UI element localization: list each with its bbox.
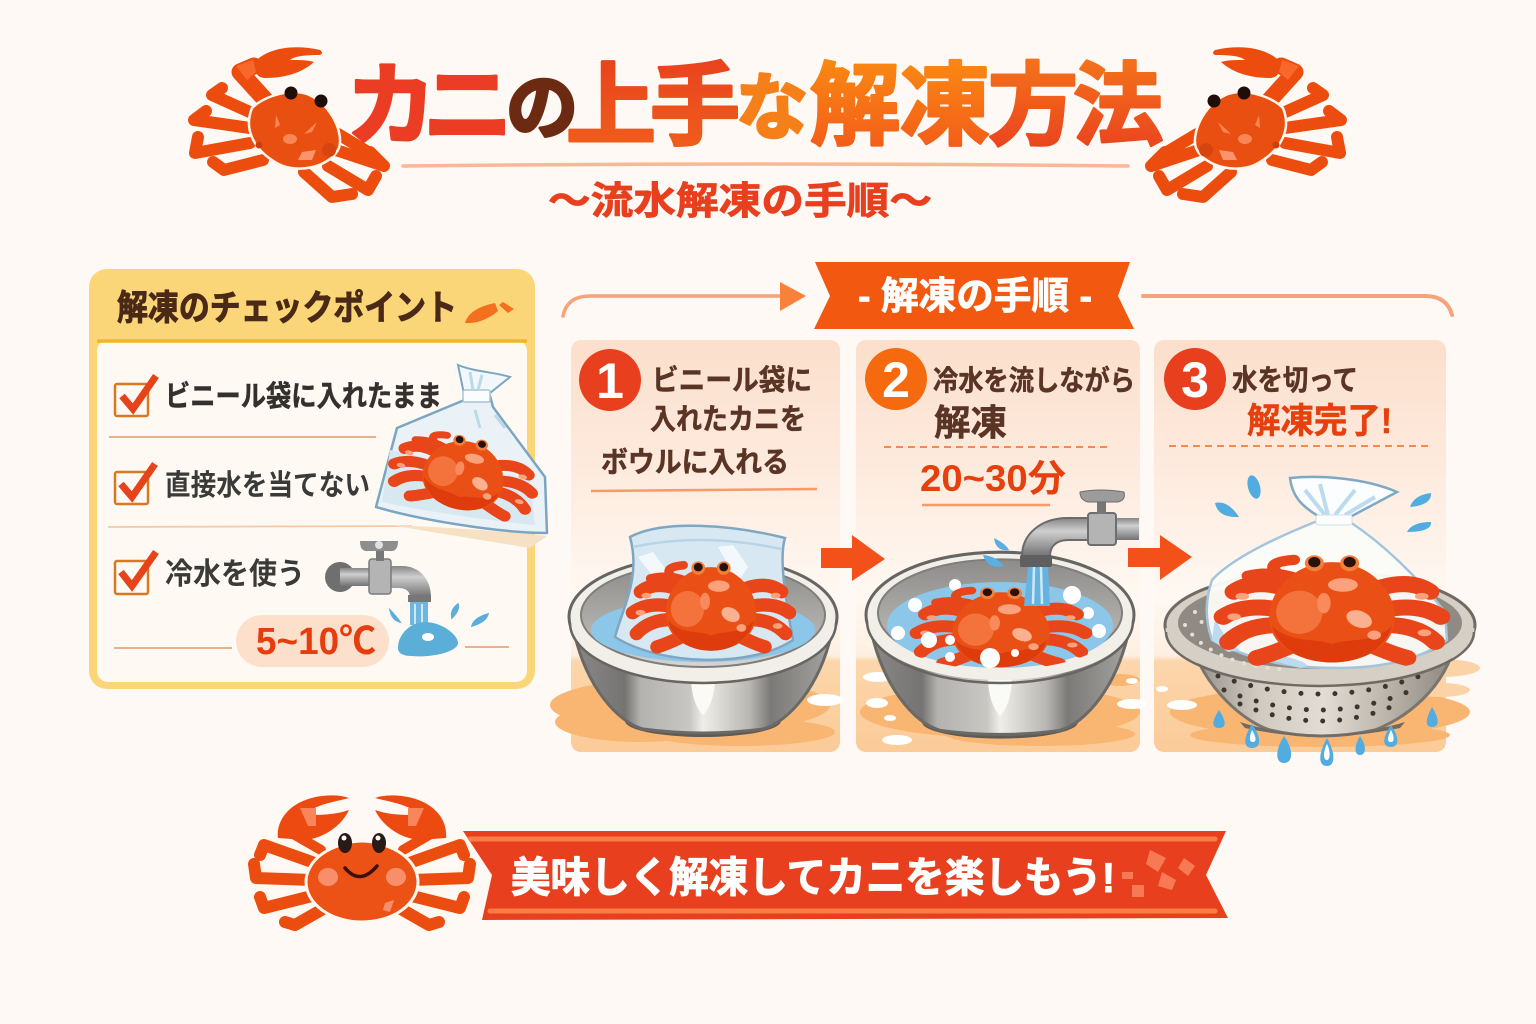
- table wash: [860, 674, 1140, 746]
- subtitle: ～流水解凍の手順～: [548, 181, 932, 223]
- step 2 text: 解凍: [934, 402, 1007, 443]
- icon: faucet: [325, 541, 488, 656]
- check item 3: [115, 552, 305, 594]
- step 1 underline: [591, 489, 817, 491]
- title: 手: [650, 57, 740, 157]
- icon: crab right of title: [1151, 47, 1341, 197]
- bowl with crab in water: [866, 552, 1134, 739]
- temperature pill: [236, 615, 389, 667]
- panel body: [97, 340, 527, 682]
- title: ニ: [423, 57, 513, 157]
- title underline: [403, 164, 1128, 166]
- temperature lines: [114, 647, 509, 648]
- step 3 text: 水を切って: [1232, 364, 1358, 397]
- falling drops: [1213, 707, 1438, 766]
- duration: 20~30分: [920, 458, 1066, 499]
- check item 2: [115, 464, 370, 504]
- dashed rule: [1169, 445, 1428, 447]
- icon: carrot-shaped accent: [465, 302, 514, 323]
- title: 方: [988, 57, 1078, 157]
- arrow: step 2 to 3: [1128, 535, 1192, 580]
- title: 上: [566, 57, 656, 157]
- ribbon sparkles: [1122, 850, 1195, 897]
- step number 1: 1: [596, 353, 624, 409]
- panel heading: 解凍のチェックポイント: [117, 289, 457, 328]
- panel frame: [89, 269, 535, 689]
- panel: checkpoints: [89, 269, 547, 689]
- water stream: [1024, 566, 1050, 606]
- check item 3: 冷水を使う: [165, 558, 305, 591]
- arrow: step 1 to 2: [821, 535, 885, 581]
- card background: [1154, 340, 1446, 752]
- panel: step 1: [550, 340, 843, 752]
- section arrow left: [563, 282, 806, 316]
- step number 2: 2: [882, 352, 910, 408]
- ribbon strips: [470, 839, 1215, 911]
- icon: bag with crab: [376, 365, 547, 548]
- step 1 text: ボウルに入れる: [601, 446, 789, 479]
- title: の: [506, 69, 578, 149]
- temperature pill: 5~10℃: [256, 621, 376, 663]
- steps banner: [814, 262, 1134, 329]
- step number 1: [579, 349, 641, 411]
- divider row: [109, 436, 376, 438]
- title: 凍: [900, 57, 990, 157]
- panel: step 3: [1154, 340, 1480, 766]
- step number 3: [1164, 348, 1226, 410]
- step number 3: 3: [1181, 352, 1209, 408]
- title: カ: [346, 57, 436, 157]
- stream streaks: [1033, 567, 1042, 604]
- step 1 text: ビニール袋に: [652, 364, 812, 397]
- header rule: [97, 339, 527, 343]
- bowl with bagged crab: [569, 526, 837, 737]
- table wash: [550, 677, 843, 746]
- divider row: [108, 526, 412, 527]
- check item 1: ビニール袋に入れたまま: [165, 380, 442, 413]
- icon: smiling crab: [254, 795, 470, 925]
- section line right: [1143, 296, 1452, 315]
- table wash: [1156, 659, 1480, 747]
- flying drops: [1215, 474, 1431, 532]
- step 1 text: [601, 364, 812, 479]
- faucet: [1020, 490, 1139, 567]
- title: 解: [810, 57, 900, 157]
- ribbon message: 美味しく解凍してカニを楽しもう!: [511, 854, 1115, 901]
- card background: [856, 340, 1140, 752]
- dashed rule: [884, 446, 1110, 448]
- step 3 result: 解凍完了!: [1247, 402, 1392, 441]
- table bubbles: [863, 672, 1147, 745]
- card background: [571, 340, 840, 752]
- colander with bagged crab: [1165, 477, 1475, 736]
- check item 1: [115, 376, 442, 416]
- steps banner: - 解凍の手順 -: [858, 276, 1092, 318]
- title: な: [736, 69, 808, 149]
- splash drops: [983, 538, 1009, 567]
- step number 2: [865, 348, 927, 410]
- panel: step 2: [856, 340, 1147, 752]
- step 2 text: 冷水を流しながら: [933, 364, 1135, 396]
- duration underline: [922, 504, 1050, 506]
- title: 法: [1073, 57, 1163, 157]
- bottom ribbon: [463, 831, 1228, 920]
- icon: crab left of title: [194, 47, 384, 197]
- step 1 text: 入れたカニを: [650, 404, 806, 436]
- step 2 text: [933, 364, 1135, 443]
- check item 2: 直接水を当てない: [165, 469, 370, 502]
